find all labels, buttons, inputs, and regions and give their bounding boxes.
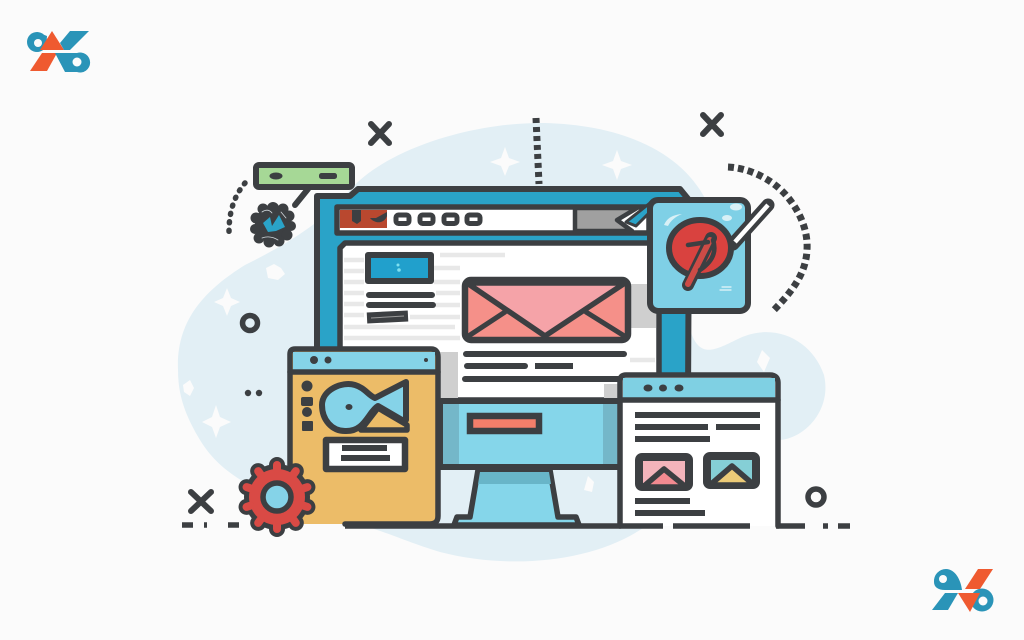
monitor stand — [454, 470, 579, 525]
toolbar colored tab — [340, 210, 387, 228]
ring markers — [242, 316, 824, 505]
toolbar grey block — [575, 208, 637, 231]
speech label — [256, 165, 352, 205]
base side shading — [443, 404, 618, 464]
sparkles — [183, 147, 770, 492]
card highlights — [664, 204, 742, 226]
white browser window — [620, 375, 778, 526]
logo: top left — [27, 31, 90, 72]
hanging dotted line — [536, 118, 539, 184]
faint text lines — [344, 255, 655, 360]
monitor base panel — [440, 401, 620, 467]
side icons — [301, 380, 313, 431]
pink image thumbnail — [639, 457, 689, 487]
browser toolbar — [337, 207, 649, 233]
screen — [340, 243, 659, 400]
red bar on monitor base — [470, 416, 539, 431]
grey shadow blocks — [440, 284, 656, 402]
toolbar buttons — [396, 215, 480, 224]
dotted arc: right — [728, 167, 807, 312]
cross marks — [191, 115, 721, 511]
screen content lines — [465, 354, 624, 379]
ground line — [182, 525, 850, 526]
brain cluster icon — [250, 202, 296, 248]
blue card in screen — [368, 255, 431, 281]
image thumbnail icon — [361, 408, 407, 430]
monitor frame — [317, 189, 689, 400]
gear — [244, 464, 310, 530]
logo: bottom right — [932, 569, 994, 612]
window text lines — [635, 415, 760, 513]
monitor — [317, 189, 689, 402]
yellow window title bar — [293, 352, 435, 371]
dotted arc: left — [229, 183, 245, 232]
pin letter mark — [688, 238, 714, 285]
text box — [326, 440, 405, 469]
yellow window — [290, 349, 438, 524]
stylus — [733, 205, 768, 244]
red pin circle — [669, 220, 731, 276]
teal image thumbnail — [707, 456, 756, 485]
screen small text bars — [367, 295, 433, 318]
small dots — [245, 390, 262, 396]
background blob — [178, 123, 825, 561]
pin card — [650, 200, 768, 311]
envelope — [465, 280, 628, 340]
toolbar teal arrow — [626, 203, 650, 226]
